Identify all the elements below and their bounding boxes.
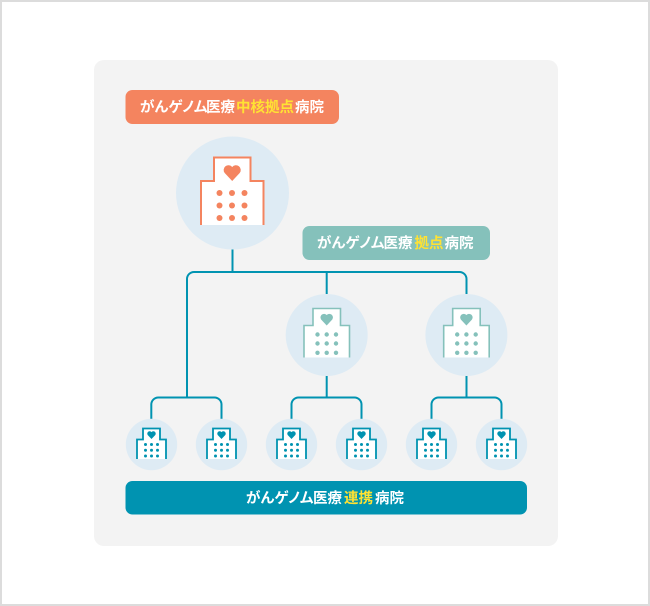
heading: base hospital label: 拠点 — [414, 234, 444, 252]
icon: partner hospital 5 — [406, 419, 457, 470]
heading: core hospital label — [126, 90, 339, 124]
heading: partner hospital label: 連携 — [344, 489, 373, 507]
heading: base hospital label: 病院 — [444, 235, 474, 252]
heading: core hospital label: がんゲノム — [140, 98, 208, 116]
panel: background — [94, 60, 558, 546]
icon: base hospital 1 — [286, 294, 368, 376]
heading: base hospital label — [302, 226, 490, 260]
heading: partner hospital label — [126, 481, 527, 514]
icon: partner hospital 2 — [196, 419, 247, 470]
heading: core hospital label: 病院 — [295, 99, 324, 116]
heading: core hospital label: 中核拠点 — [236, 98, 294, 116]
icon: partner hospital 1 — [126, 419, 177, 470]
heading: partner hospital label: 医療 — [313, 490, 342, 507]
heading: base hospital label: がんゲノム — [317, 234, 385, 252]
icon: partner hospital 3 — [266, 419, 317, 470]
heading: core hospital label: 医療 — [206, 99, 235, 116]
icon: core hospital — [176, 136, 289, 250]
heading: partner hospital label: 病院 — [375, 490, 404, 507]
icon: base hospital 2 — [425, 294, 507, 376]
connector lines — [151, 248, 502, 419]
heading: partner hospital label: がんゲノム — [246, 489, 314, 507]
icon: partner hospital 6 — [476, 419, 527, 470]
heading: base hospital label: 医療 — [384, 235, 413, 252]
icon: partner hospital 4 — [336, 419, 387, 470]
